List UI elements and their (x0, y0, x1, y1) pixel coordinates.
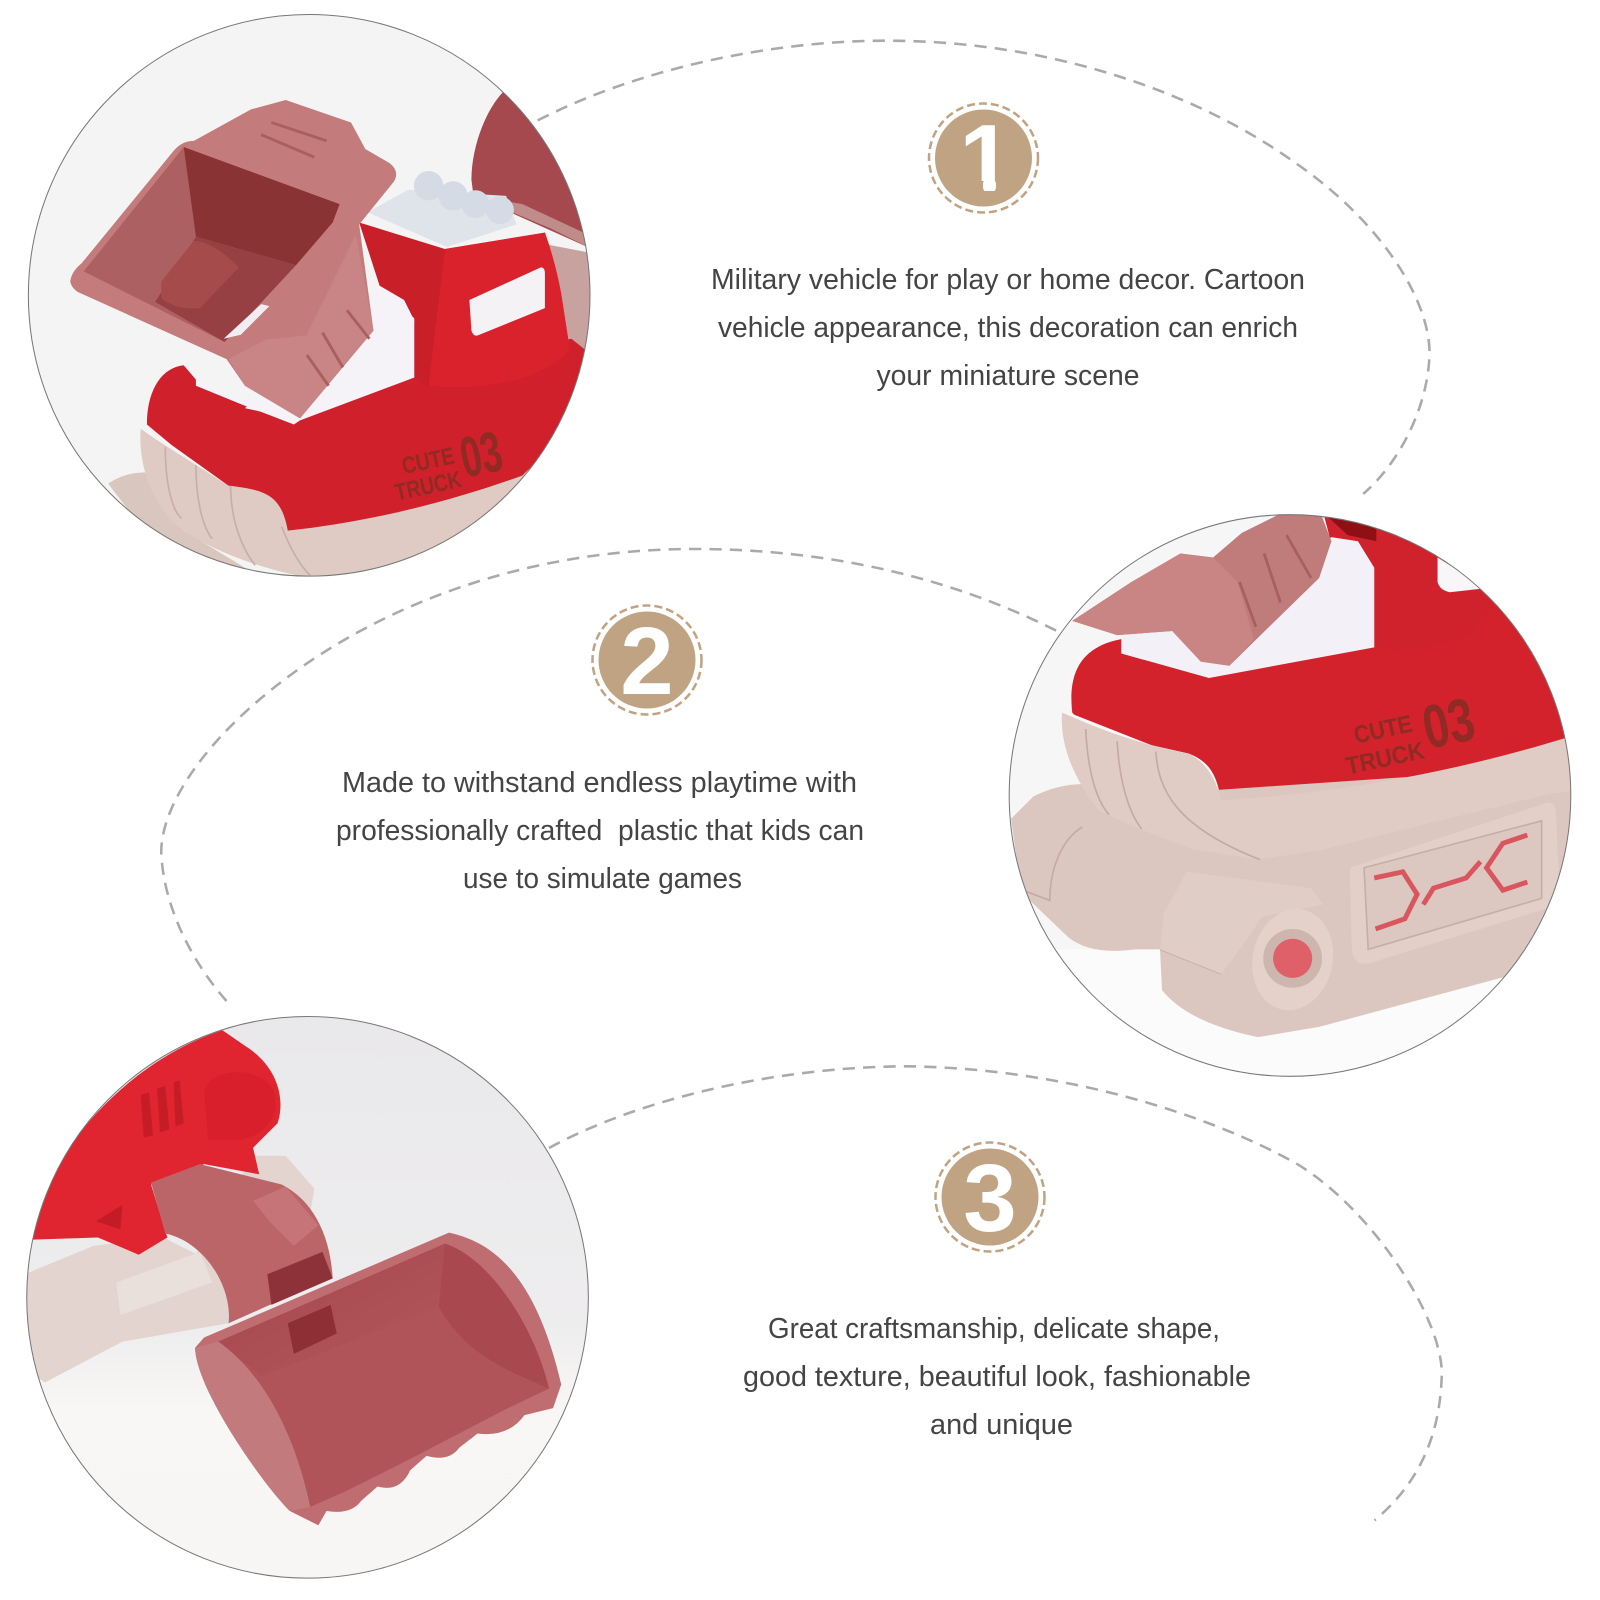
printed logo: CUTE TRUCK 03: CUTE (400, 444, 457, 480)
text block 2: use to simulate games (463, 863, 742, 895)
printed logo: CUTE TRUCK 03 (1335, 685, 1481, 780)
text block 1: Military vehicle for play or home decor. Cartoon (711, 264, 1305, 296)
printed logo: CUTE TRUCK 03 (385, 419, 508, 506)
printed logo: CUTE TRUCK 03: TRUCK (1343, 737, 1427, 780)
text block 1: your miniature scene (876, 360, 1140, 392)
number badge 3: 3 (963, 1145, 1017, 1252)
text block 3: and unique (930, 1409, 1073, 1441)
photo circle: front loader bucket (24, 1017, 588, 1578)
number badge 3 (936, 1142, 1044, 1252)
number badge 1 (929, 104, 1038, 212)
photo circle: track and wheel close-up (1005, 513, 1580, 1080)
photo circle: tilted dump bucket and red truck (28, 14, 592, 578)
text block 2: professionally crafted plastic that kids can (336, 815, 864, 847)
number badge 2 (592, 606, 702, 715)
dashed connector: middle (161, 549, 1056, 1001)
text block 3: Great craftsmanship, delicate shape, (768, 1313, 1220, 1345)
printed logo: CUTE TRUCK 03: CUTE (1351, 711, 1415, 749)
printed logo: CUTE TRUCK 03: 03 (1417, 685, 1481, 762)
dashed connector: bottom (549, 1066, 1442, 1520)
number badge 2: 2 (620, 608, 674, 715)
printed logo: CUTE TRUCK 03: TRUCK (393, 467, 464, 506)
text block 3: good texture, beautiful look, fashionable (743, 1361, 1251, 1393)
text block 1 (711, 264, 1305, 392)
text block 2 (336, 767, 864, 895)
printed logo: CUTE TRUCK 03: 03 (455, 419, 508, 491)
number badge 1: 1 (959, 105, 1013, 212)
text block 1: vehicle appearance, this decoration can enrich (718, 312, 1298, 344)
text block 2: Made to withstand endless playtime with (342, 767, 857, 799)
text block 3 (743, 1313, 1251, 1441)
dashed connector: top (538, 41, 1430, 494)
